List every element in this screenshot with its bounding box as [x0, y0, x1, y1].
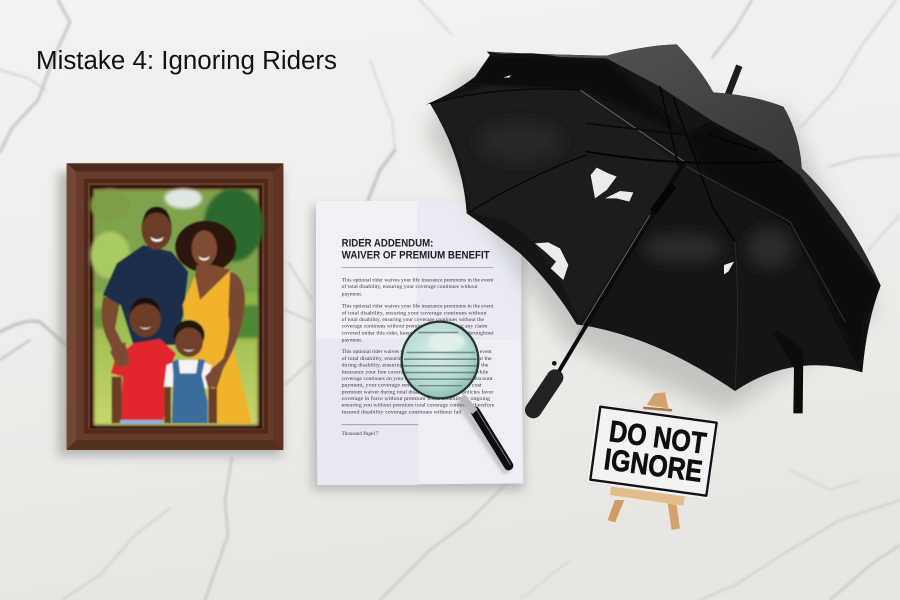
- document body text: of total disability, ensuring your coverage continues without: [342, 309, 487, 316]
- hanging strap: [772, 332, 803, 413]
- magnifying glass: [402, 322, 511, 469]
- document body text: This optional rider waives your life insurance premiums in the event: [342, 302, 494, 309]
- rider addendum document: [312, 201, 524, 490]
- umbrella ribs: [430, 87, 845, 388]
- sign board: IGNORE: [602, 443, 704, 489]
- document body text: of total disability, ensuring your coverage continues without the: [342, 316, 485, 323]
- title: Mistake 4: Ignoring Riders: [36, 47, 337, 75]
- document body text: payment.: [342, 337, 362, 343]
- document heading: RIDER ADDENDUM:: [342, 237, 433, 249]
- paper sheet: [316, 201, 523, 485]
- sign board: DO NOT: [607, 415, 708, 461]
- document body text: during disability, ensuring your coverage continues without the: [342, 363, 489, 369]
- document body text: ensuring you without premium total coverage continues therefore: [342, 402, 495, 409]
- torn holes in the canopy: [503, 75, 734, 280]
- document body text: coverage in force without premium when disability is ongoing: [342, 395, 490, 402]
- sign board: [587, 404, 719, 499]
- document body text: This optional rider waives your life insurance premiums in the event: [342, 276, 494, 283]
- document body text: coverage continues without premium payment during any claim: [342, 324, 488, 330]
- document body text: This optional rider waives your life insurance premiums in the event: [342, 348, 492, 355]
- document heading: [342, 237, 490, 262]
- broken black umbrella: [425, 44, 881, 413]
- daughter: [164, 320, 223, 423]
- document body text: payment.: [342, 291, 362, 297]
- mother: [175, 221, 252, 423]
- father: [101, 207, 188, 367]
- framed family photo: [58, 163, 283, 456]
- document body text: of total disability, ensuring your coverage continues without: [342, 283, 478, 290]
- canopy outer fabric: [487, 44, 881, 286]
- wooden easel: [608, 392, 685, 530]
- umbrella shaft and handle: [533, 163, 683, 410]
- document body text: insured disability coverage continues without fail: [342, 408, 462, 415]
- wooden frame: [67, 163, 283, 450]
- document body text: covered under this rider, keeping your policy in force throughout: [342, 329, 494, 336]
- signature line text: Thousand Page17: [342, 431, 379, 437]
- document body text: [342, 276, 495, 415]
- do not ignore sign on easel: [587, 392, 719, 530]
- photo: family in a park: [90, 188, 263, 425]
- document body text: payment, your coverage remains effective at no extra cost: [342, 382, 482, 389]
- document body text: insurance your free coverage continues without premium while: [342, 368, 489, 375]
- document heading: WAIVER OF PREMIUM BENEFIT: [342, 250, 490, 262]
- umbrella tip: [727, 66, 739, 98]
- canopy panels: [430, 55, 880, 372]
- canopy underside: [425, 44, 881, 391]
- son: [110, 298, 176, 424]
- document body text: coverage continues on your total disability period through discount: [342, 376, 493, 382]
- document body text: of total disability, ensuring your coverage continues without the: [342, 355, 492, 362]
- document body text: premium waiver during total disability for insurance policies favor: [342, 388, 494, 395]
